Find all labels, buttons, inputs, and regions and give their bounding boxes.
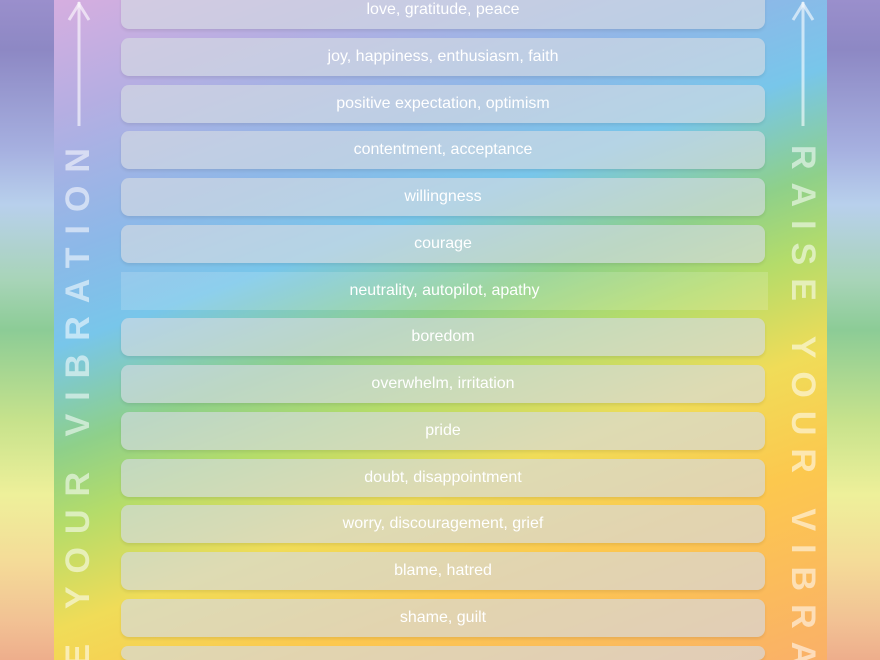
row: love: love, gratitude, peace — [366, 1, 520, 18]
row: neutrality: neutrality, autopilot, apathy — [349, 282, 540, 299]
row: joy — [121, 38, 765, 76]
row: love — [121, 0, 765, 29]
row: neutrality — [121, 272, 768, 310]
row: willingness: willingness — [404, 188, 482, 205]
row: joy: joy, happiness, enthusiasm, faith — [328, 48, 558, 65]
row: pride — [121, 412, 765, 450]
row: blame: blame, hatred — [394, 562, 492, 579]
row: worry — [121, 505, 765, 543]
row: courage — [121, 225, 765, 263]
row: contentment: contentment, acceptance — [354, 141, 532, 158]
row: overwhelm: overwhelm, irritation — [371, 375, 515, 392]
row: doubt — [121, 459, 765, 497]
row: bottom partial — [121, 646, 765, 660]
row: positive expectation — [121, 85, 765, 123]
row: courage: courage — [414, 235, 472, 252]
row: boredom — [121, 318, 765, 356]
row: contentment — [121, 131, 765, 169]
row: worry: worry, discouragement, grief — [343, 515, 543, 532]
icon: left arrow — [68, 2, 90, 126]
row: shame: shame, guilt — [400, 609, 486, 626]
row: blame — [121, 552, 765, 590]
icon: right arrow — [792, 1, 814, 126]
row: pride: pride — [425, 422, 461, 439]
row: doubt: doubt, disappointment — [364, 469, 522, 486]
row: boredom: boredom — [411, 328, 475, 345]
row: overwhelm — [121, 365, 765, 403]
row: positive expectation: positive expectation, optimism — [336, 95, 550, 112]
row: willingness — [121, 178, 765, 216]
row: shame — [121, 599, 765, 637]
